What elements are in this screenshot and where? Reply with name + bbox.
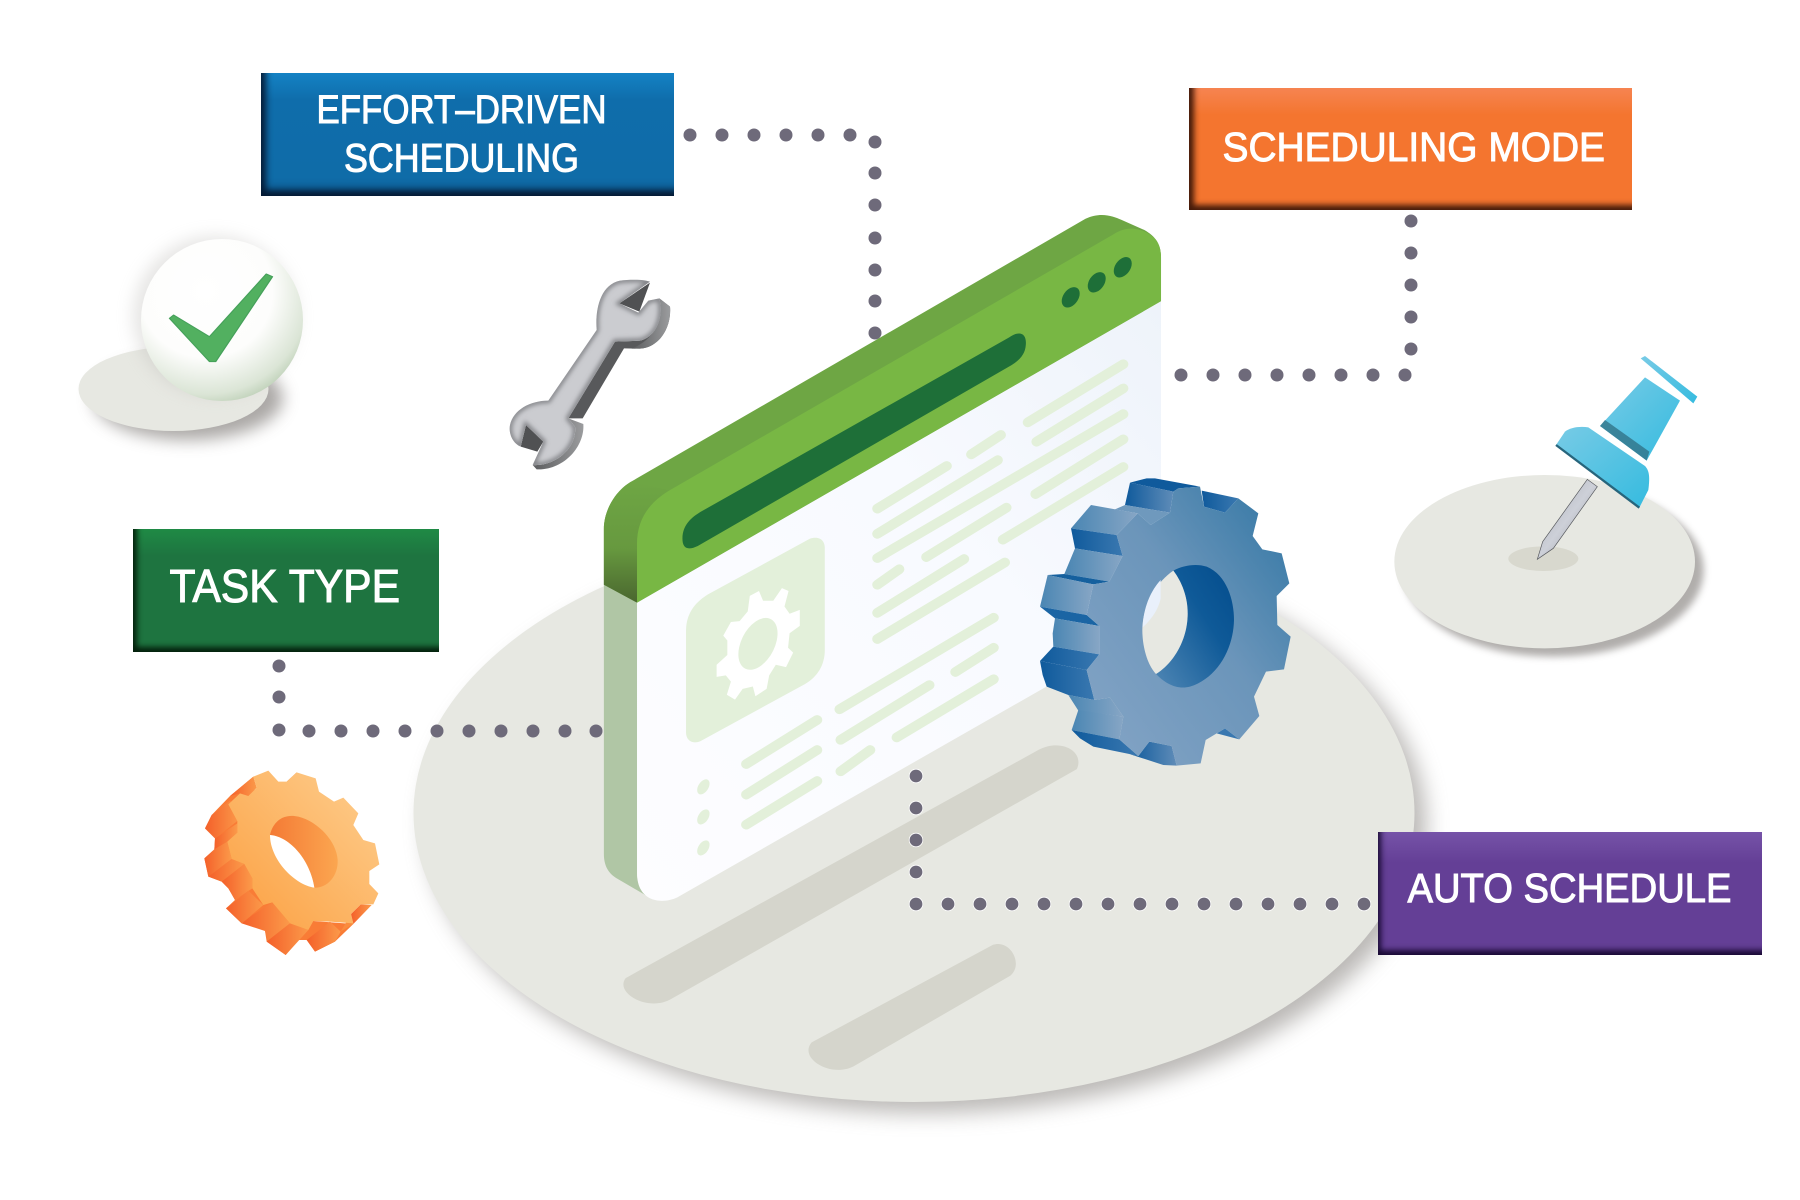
- pin base: [1556, 427, 1649, 508]
- bullets: [695, 777, 712, 857]
- label: scheduling mode: [1189, 88, 1632, 210]
- window buttons: [1058, 254, 1135, 311]
- icon: push pin on disc: [1394, 356, 1704, 657]
- check: [169, 274, 273, 362]
- browser window: [604, 215, 1161, 901]
- disc under sphere: [93, 356, 283, 440]
- title bar depth: [604, 215, 1161, 603]
- icon: blue gear: [1040, 478, 1291, 766]
- connector: task type: [272, 660, 602, 738]
- window side, lower: [604, 585, 649, 897]
- connector: scheduling mode: [1174, 214, 1418, 382]
- connector: effort-driven scheduling: [684, 128, 882, 340]
- label: task type: [133, 529, 439, 652]
- gear hole: [1156, 565, 1234, 688]
- platform: main disc: [414, 524, 1426, 1113]
- icon: wrench: [510, 280, 670, 469]
- image placeholder with gear: [686, 538, 825, 742]
- title bar: [637, 229, 1161, 603]
- pin needle: [1537, 479, 1597, 559]
- window body: [637, 301, 1161, 901]
- address bar: [682, 333, 1026, 548]
- icon: check mark sphere: [78, 236, 303, 440]
- label: effort-driven scheduling: [261, 73, 674, 196]
- label: effort-driven scheduling: SCHEDULING: [344, 136, 579, 180]
- label: scheduling mode: SCHEDULING MODE: [1222, 124, 1605, 170]
- illustration: [78, 128, 1708, 1126]
- orange gear hole: [270, 816, 338, 888]
- label: auto schedule: AUTO SCHEDULE: [1408, 865, 1732, 911]
- label: task type: TASK TYPE: [170, 560, 400, 612]
- pin disc: [1403, 483, 1704, 657]
- label: auto schedule: [1378, 832, 1762, 955]
- text lines: [746, 364, 1123, 825]
- connector: auto schedule: [909, 769, 1371, 911]
- pin cap: [1641, 356, 1697, 403]
- label: effort-driven scheduling: EFFORT–DRIVEN: [316, 88, 606, 132]
- pin body: [1600, 377, 1680, 461]
- icon: orange gear: [204, 771, 379, 955]
